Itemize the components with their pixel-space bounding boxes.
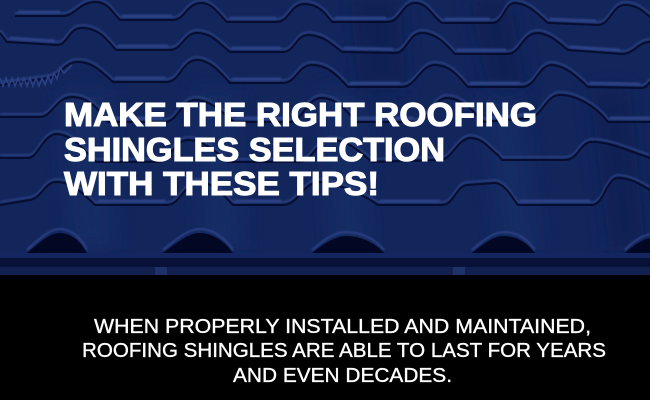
intro text: WHEN PROPERLY INSTALLED AND MAINTAINED,: [94, 315, 591, 338]
bottom tile arches: [27, 233, 650, 253]
title: MAKE THE RIGHT ROOFING: [64, 96, 537, 133]
tile shadow edges: [0, 2, 650, 205]
intro text: ROOFING SHINGLES ARE ABLE TO LAST FOR YEARS: [82, 339, 606, 362]
gutter: [0, 253, 650, 258]
title: SHINGLES SELECTION: [64, 131, 445, 168]
darker valleys: [350, 0, 645, 250]
lit flat tile lips: [10, 12, 650, 201]
title: WITH THESE TIPS!: [64, 165, 379, 202]
crest glints: [0, 0, 650, 202]
intro text: [82, 315, 606, 387]
serrated flashing: [0, 65, 72, 86]
title: [64, 96, 537, 202]
panel: black intro band: [0, 275, 650, 400]
intro text: AND EVEN DECADES.: [233, 364, 452, 387]
soft ridge shading: [60, 90, 540, 250]
panel: navy roof photo: [0, 0, 650, 276]
